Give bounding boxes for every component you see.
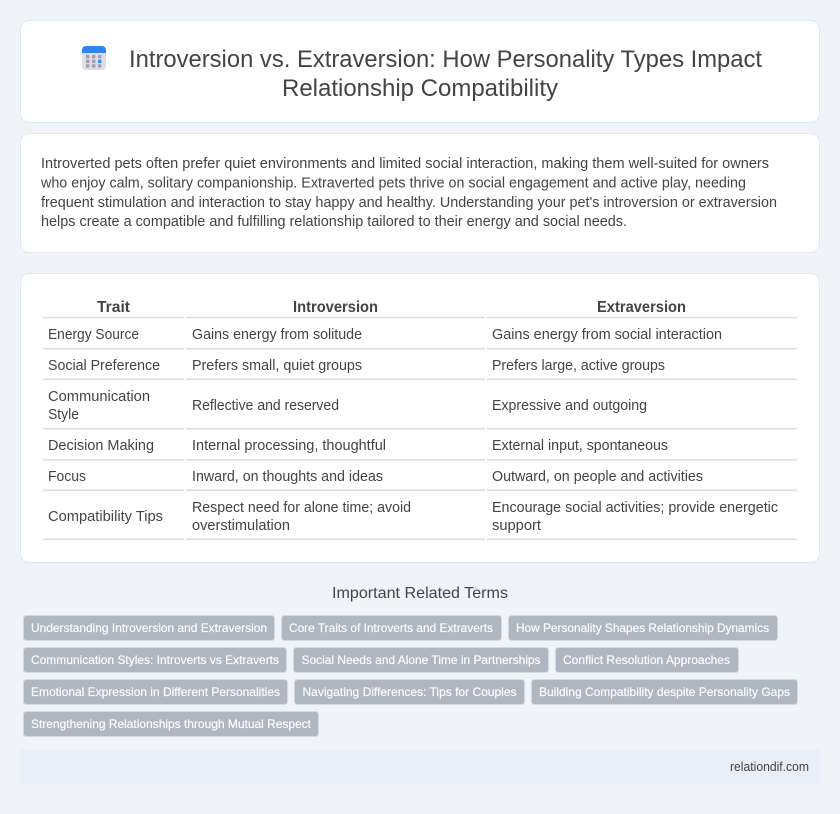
row: decision making: Internal processing, thoughtful [192, 438, 386, 454]
tag: Strengthening Relationships through Mutual Respect [31, 717, 312, 731]
row: communication style: Reflective and reserved [192, 398, 339, 414]
tag: Building Compatibility despite Personality Gaps [539, 685, 790, 699]
tag: Understanding Introversion and Extraversion [31, 621, 267, 635]
tag: How Personality Shapes Relationship Dynamics [516, 621, 769, 635]
row: social preference: Prefers large, active groups [492, 358, 665, 374]
intro text: Introverted pets often prefer quiet environments and limited social interaction, making them well-suited for owners [41, 155, 769, 172]
row: decision making: External input, spontaneous [492, 438, 668, 454]
tag [532, 680, 798, 704]
row: communication style: Communication [48, 389, 150, 405]
table header: Extraversion [597, 299, 686, 316]
tag: Social Needs and Alone Time in Partnerships [302, 653, 540, 667]
table header: Trait [97, 299, 131, 316]
tag [282, 616, 502, 640]
row: social preference: Social Preference [48, 358, 160, 374]
intro text [40, 155, 777, 230]
row: decision making: Decision Making [48, 438, 154, 454]
title [129, 46, 762, 102]
tag: Navigating Differences: Tips for Couples [302, 685, 516, 699]
row: energy source [48, 327, 722, 343]
row: compatibility tips: Compatibility Tips [48, 509, 163, 525]
row: communication style [48, 389, 647, 423]
tag [508, 616, 778, 640]
panel: comparison table [20, 274, 820, 562]
tag: Emotional Expression in Different Personalities [31, 685, 280, 699]
tag [24, 712, 318, 736]
tag [24, 616, 274, 640]
row: focus: Inward, on thoughts and ideas [192, 469, 383, 485]
tag [556, 648, 738, 672]
panel: header [20, 20, 820, 122]
title: Relationship Compatibility [282, 75, 558, 102]
row: focus: Focus [48, 469, 86, 485]
intro text: frequent stimulation and interaction to stay happy and healthy. Understanding your pet's introversion or extraversion [41, 194, 777, 211]
table header [97, 299, 686, 316]
related term tags [24, 616, 798, 736]
footer [20, 750, 820, 784]
row: communication style: Expressive and outgoing [492, 398, 647, 414]
tag: Core Traits of Introverts and Extraverts [289, 621, 493, 635]
table header: Introversion [293, 299, 378, 316]
row: compatibility tips: support [492, 518, 541, 534]
row: communication style: Style [48, 407, 79, 423]
title: Introversion vs. Extraversion: How Personality Types Impact [129, 46, 762, 73]
panel: introduction [20, 134, 820, 252]
tag: Conflict Resolution Approaches [563, 653, 730, 667]
row: focus: Outward, on people and activities [492, 469, 703, 485]
row: decision making [48, 438, 668, 454]
row: compatibility tips: Encourage social activities; provide energetic [492, 500, 778, 516]
tag [24, 648, 286, 672]
heading: related terms: Important Related Terms [332, 585, 508, 602]
icon: calendar [82, 46, 106, 70]
row: social preference: Prefers small, quiet groups [192, 358, 362, 374]
row: compatibility tips: overstimulation [192, 518, 290, 534]
row: compatibility tips: Respect need for alone time; avoid [192, 500, 411, 516]
intro text: who enjoy calm, solitary companionship. Extraverted pets thrive on social engagement and active play, needing [40, 174, 746, 192]
tag [294, 648, 548, 672]
footer: relationdif.com [730, 759, 809, 774]
row: compatibility tips [48, 500, 778, 534]
tag [294, 680, 524, 704]
tag [24, 680, 288, 704]
row: focus [48, 469, 703, 485]
intro text: helps create a compatible and fulfilling relationship tailored to their energy and social needs. [41, 213, 627, 230]
row: energy source: Energy Source [48, 327, 139, 343]
row: energy source: Gains energy from social interaction [492, 327, 722, 343]
row: social preference [48, 358, 665, 374]
tag: Communication Styles: Introverts vs Extraverts [31, 653, 279, 667]
row: energy source: Gains energy from solitude [192, 327, 362, 343]
